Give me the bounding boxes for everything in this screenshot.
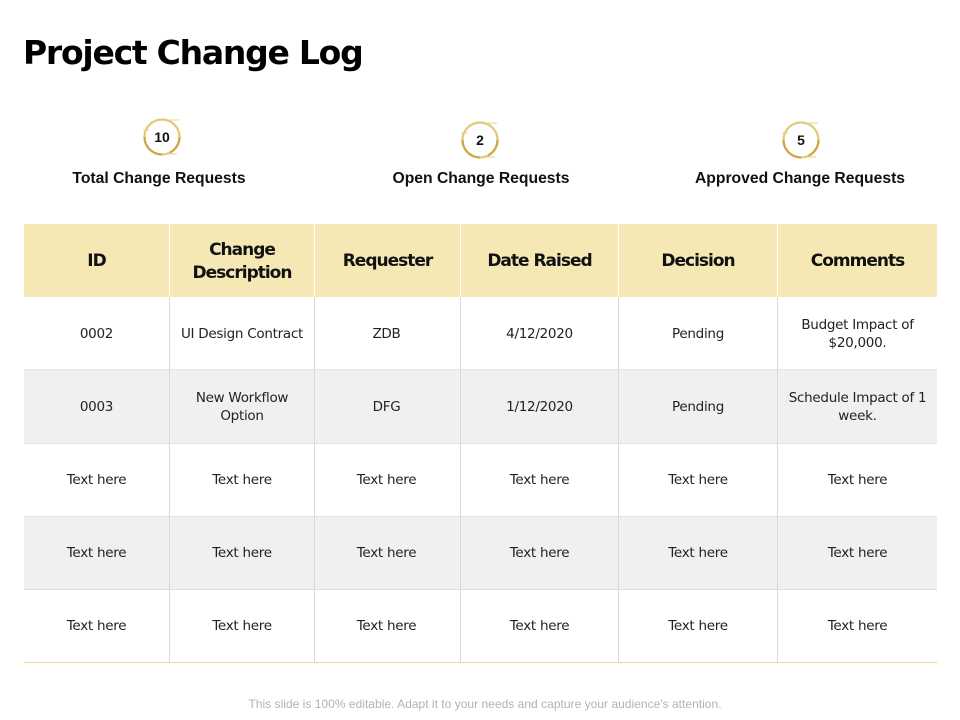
row 0002: Pending [672,326,724,342]
row 3 placeholders [66,472,887,488]
row 5 placeholders [66,618,887,634]
header: Requester: Requester [343,251,432,271]
row 0002: 4/12/2020 [506,326,573,342]
label: total change requests: Total Change Requests [72,170,246,187]
header: Decision: Decision [661,251,735,271]
header: Date Raised: Date Raised [487,251,592,271]
row 4 placeholders: Text here [510,544,569,560]
row 3 placeholders: Text here [510,472,569,488]
row 0003: Schedule Impact of 1 [789,390,926,406]
header: Change Description: Change [209,240,275,260]
header: ID: ID [87,251,106,271]
row 5 placeholders: Text here [828,618,887,634]
icon: open change requests badge: 2 [476,132,484,148]
row 3 placeholders: Text here [212,472,272,488]
icon: total change requests badge: 10 [154,129,170,145]
row 4 placeholders: Text here [357,544,416,560]
icon: total change requests badge [143,118,181,156]
header: Change Description: Description [193,262,291,282]
row 0003: Option [220,408,264,424]
row 3 placeholders: Text here [67,472,126,488]
row 5 placeholders: Text here [357,618,416,634]
alternating row: 0003 [24,370,937,443]
row 0003: DFG [373,398,400,414]
row 0003: week. [838,408,877,424]
row 0002: UI Design Contract [181,326,303,342]
icon: approved change requests badge [782,121,820,159]
row 0003 [80,390,926,424]
row 0002: 0002 [80,326,113,342]
row 0002: ZDB [372,326,401,342]
row 0003: 1/12/2020 [506,398,573,414]
row 0003: 0003 [80,398,113,414]
row 4 placeholders [66,544,887,560]
row 4 placeholders: Text here [828,544,887,560]
header row background [24,224,937,297]
row 5 placeholders: Text here [510,618,569,634]
icon: open change requests badge [461,121,499,159]
header: Comments: Comments [811,251,904,271]
footer note: This slide is 100% editable. Adapt it to your needs and capture your audience's attention. [248,697,722,711]
row 0003: New Workflow [196,390,288,406]
row 0002: $20,000. [829,334,886,350]
row 4 placeholders: Text here [212,544,272,560]
row 0003: Pending [672,398,724,414]
row 3 placeholders: Text here [668,472,728,488]
row 5 placeholders: Text here [67,618,126,634]
title: Project Change Log [23,33,362,72]
icon: approved change requests badge: 5 [797,132,805,148]
label: open change requests: Open Change Requests [393,170,569,187]
row 0002 [80,316,914,350]
row 4 placeholders: Text here [668,544,728,560]
row 3 placeholders: Text here [357,472,416,488]
row 0002: Budget Impact of [801,316,914,332]
alternating row: 4th [24,516,937,589]
label: approved change requests: Approved Change Requests [695,170,905,187]
row 5 placeholders: Text here [212,618,272,634]
row 3 placeholders: Text here [828,472,887,488]
row 5 placeholders: Text here [668,618,728,634]
row 4 placeholders: Text here [67,544,126,560]
header: Change Description [193,240,292,282]
